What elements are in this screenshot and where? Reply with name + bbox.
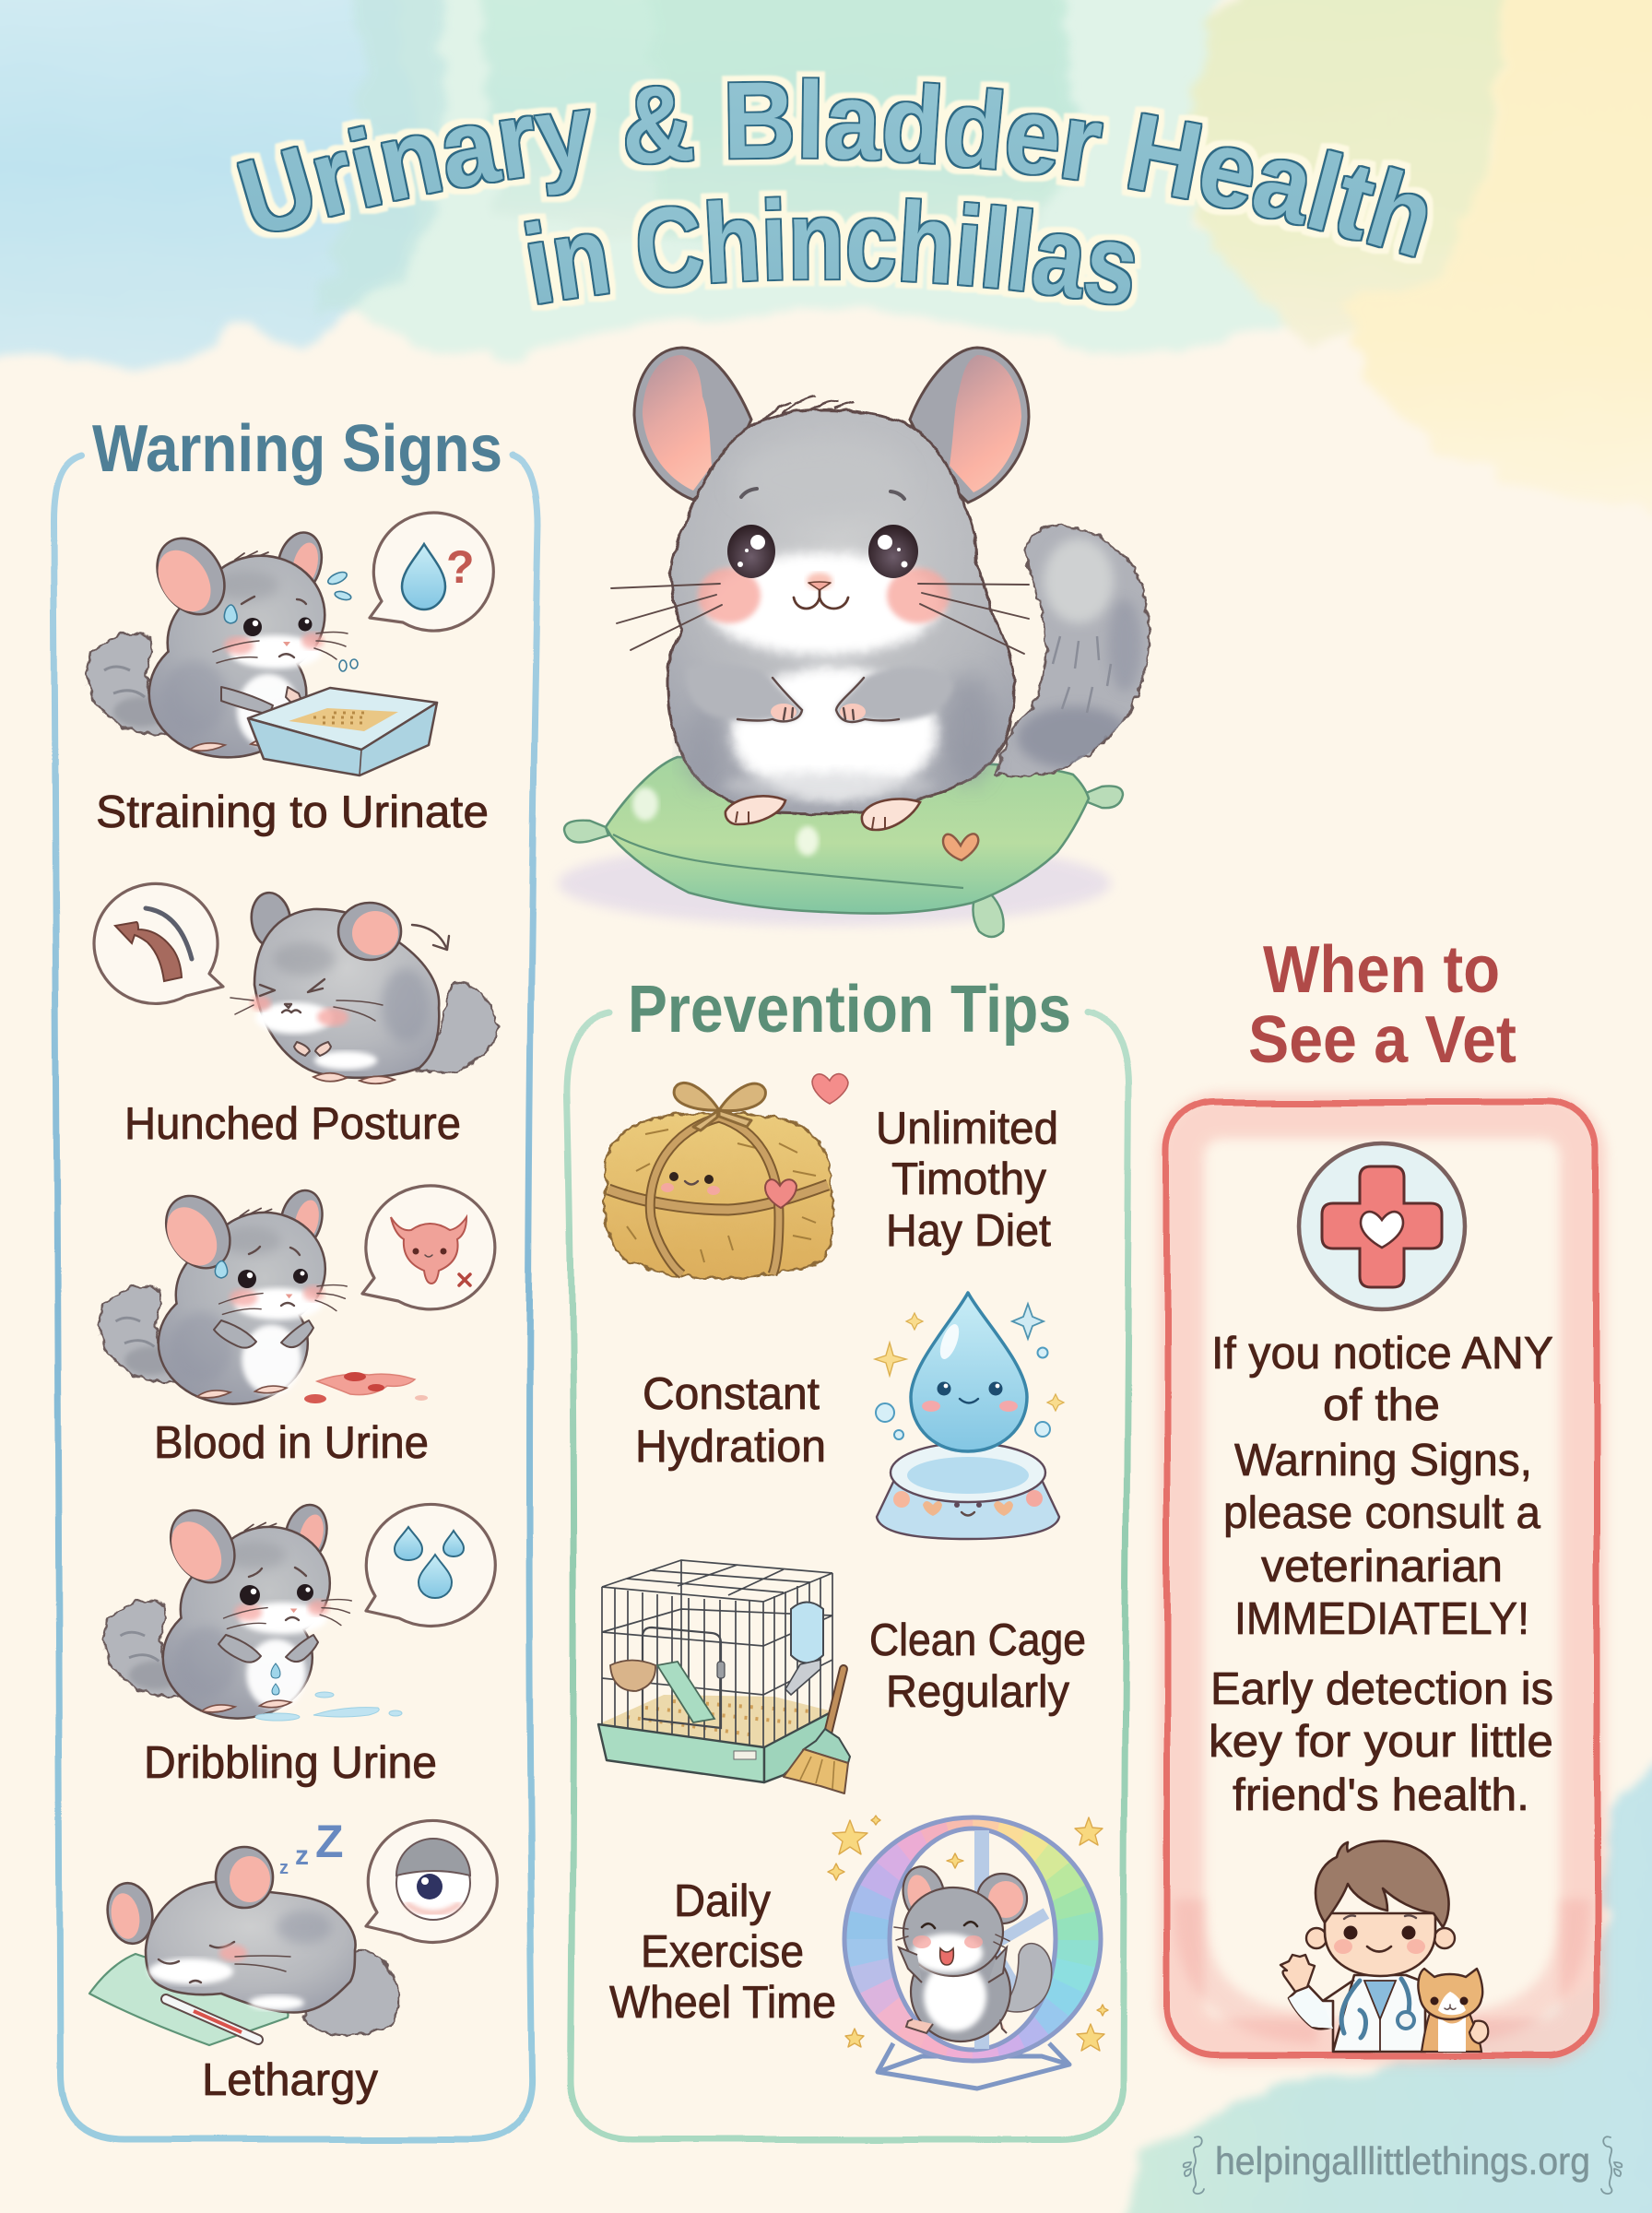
icon: happy chinchilla running [894,1863,1052,2041]
right ear [910,348,1029,503]
urgent message text: please consult a [1223,1488,1541,1538]
arms [686,664,952,722]
early detection text: key for your little [1209,1717,1553,1767]
urgent message text [1211,1329,1553,1644]
icon: water drop [911,1293,1027,1451]
urgent message text: veterinarian [1261,1542,1503,1592]
icon: chinchilla worried [99,1184,347,1402]
heading: when to see a vet [1248,933,1516,1077]
warning sign: straining to urinate [87,513,493,837]
tip text: Regularly [886,1667,1069,1717]
tip text: Timothy [891,1154,1046,1204]
left ear [634,348,751,500]
feet [726,796,920,830]
label: Blood in Urine [154,1418,429,1468]
speech bubble: arched back [94,883,223,1003]
hero chinchilla on cushion [558,348,1150,937]
label: Dribbling Urine [144,1738,437,1788]
speech bubble: droopy eye [366,1820,497,1942]
warning sign: dribbling urine [103,1498,495,1788]
icon: litter tray [248,688,437,775]
label: Lethargy [202,2055,378,2105]
icon: thermometer [166,1999,258,2040]
icon: zzz: z [295,1840,309,1871]
panel: prevention tips [568,973,1129,2139]
icon: heart [812,1074,848,1104]
icon: broom [784,1669,850,1793]
heading: warning signs: Warning Signs [92,412,502,486]
tip text: Wheel Time [609,1978,836,2028]
tip text: Hydration [635,1422,826,1472]
tip text: Unlimited [876,1104,1058,1154]
cushion [558,757,1123,937]
icon: vet with cat [1280,1841,1488,2052]
warning sign: blood in urine [99,1184,495,1468]
icon: zzz: Z [315,1816,344,1867]
speech bubble: water drop question [370,513,493,631]
warning sign: hunched posture [94,883,498,1149]
title: in Chinchillas [518,190,1141,312]
icon: cage [598,1560,832,1782]
speech bubble: bladder [362,1186,495,1309]
vet box [1167,1102,1597,2055]
ornament left [1184,2136,1204,2194]
early detection text [1209,1664,1553,1820]
icon: sweat drops [326,570,358,671]
tip text: Clean Cage [869,1615,1086,1665]
icon: puddle [255,1692,402,1721]
tip: clean cage [598,1560,1086,1793]
tip text [876,1104,1058,1256]
face [611,489,1029,654]
tip text: Daily [674,1876,771,1926]
panel: warning signs [53,412,539,2139]
title: Urinary & Bladder Health [230,70,1434,264]
urgent message text: of the [1323,1380,1440,1430]
tip: hydration [635,1293,1064,1539]
label: Straining to Urinate [96,787,489,837]
icon: stars [828,1816,1108,2051]
tip text: Constant [643,1369,820,1419]
tip: exercise wheel [609,1816,1108,2089]
tip: hay [604,1074,1058,1278]
website footer [1184,2136,1622,2194]
question mark: ? [446,541,475,593]
label: Hunched Posture [124,1099,461,1149]
urgent message text: Warning Signs, [1234,1436,1532,1485]
early detection text: friend's health. [1233,1770,1529,1820]
urgent message text: IMMEDIATELY! [1234,1594,1529,1644]
icon: hay bale [604,1083,834,1278]
icon: zzz [279,1816,344,1878]
ornament right [1601,2136,1622,2194]
speech bubble: drops [366,1504,495,1626]
tip text [635,1369,826,1472]
tip text: Exercise [641,1927,804,1977]
warning sign: lethargy [89,1816,497,2105]
heading: when to see a vet: See a Vet [1248,1003,1516,1077]
early detection text: Early detection is [1210,1664,1553,1714]
heading: prevention tips: Prevention Tips [628,973,1071,1047]
panel: when to see a vet [1167,933,1597,2055]
tip text [609,1876,836,2028]
url text: helpingalllittlethings.org [1215,2139,1590,2183]
heading: when to see a vet: When to [1263,933,1500,1007]
icon: blood puddle [304,1372,428,1403]
icon: hunched chinchilla [230,890,498,1083]
icon: zzz: z [279,1858,289,1878]
tip text [869,1615,1086,1717]
icon: sleepy chinchilla [89,1847,399,2045]
body and head [667,396,1014,814]
icon: chinchilla dribbling [103,1498,351,1717]
icon: wheel stand [878,2043,1069,2089]
heart on cushion [943,834,978,860]
icon: rainbow wheel [844,1817,1101,2061]
icon: chinchilla straining [87,526,348,756]
icon: water bowl [877,1443,1059,1539]
urgent message text: If you notice ANY [1211,1329,1553,1379]
tail [996,527,1150,775]
icon: sparkles and bubbles [875,1304,1064,1439]
icon: medical cross [1299,1143,1465,1309]
tip text: Hay Diet [886,1206,1051,1256]
